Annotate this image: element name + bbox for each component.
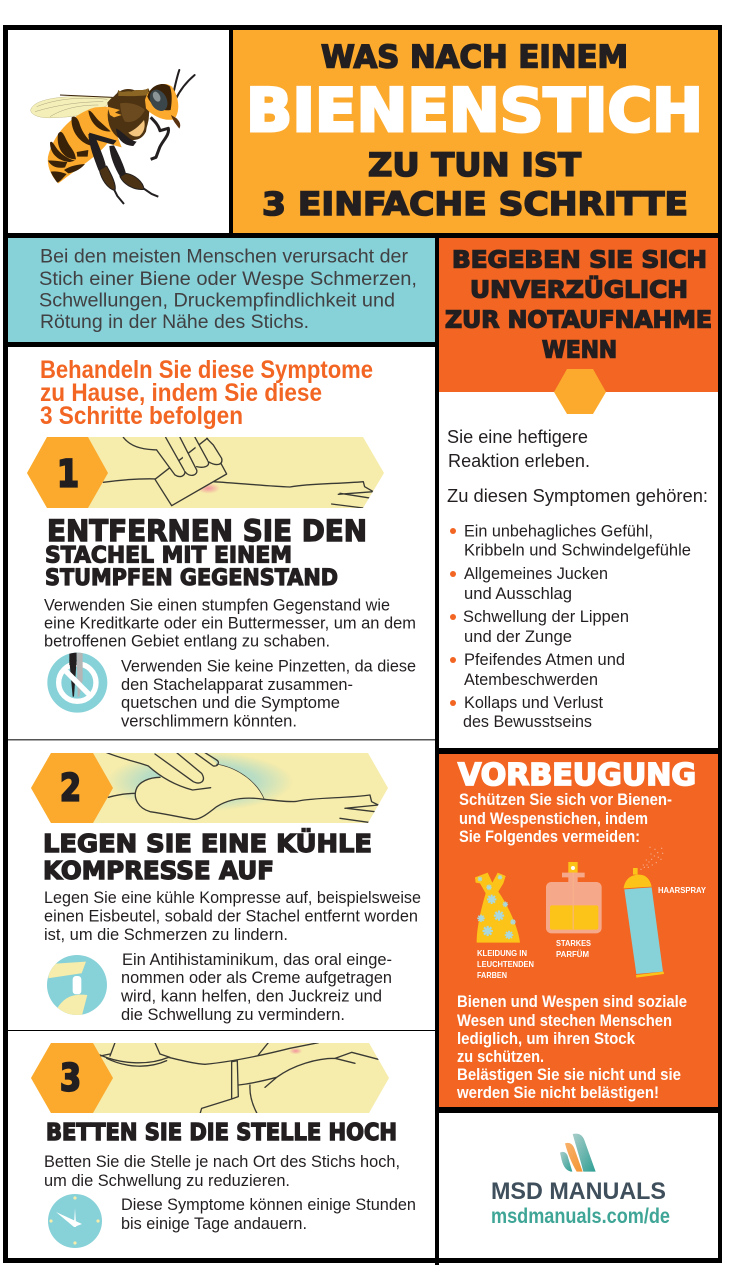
label: strong perfume: STARKES xyxy=(556,938,591,948)
step 1 heading: ENTFERNEN SIE DEN xyxy=(47,514,367,548)
prevention intro: und Wespenstichen, indem xyxy=(459,809,648,828)
symptoms list: und Ausschlag xyxy=(464,584,572,603)
step 1 heading: STACHEL MIT EINEM xyxy=(45,544,292,568)
prevention intro xyxy=(459,790,672,846)
step 2 text: ist, um die Schmerzen zu lindern. xyxy=(44,925,288,944)
icon: antihistamine cream xyxy=(47,955,107,1017)
panel: prevention xyxy=(439,754,718,1107)
prevention message: zu schützen. xyxy=(457,1047,544,1066)
prevention intro: Sie Folgendes vermeiden: xyxy=(459,827,640,846)
title: was nach einem: WAS NACH EINEM xyxy=(321,40,628,76)
title: zu tun ist: ZU TUN IST xyxy=(368,146,581,184)
emergency heading: BEGEBEN SIE SICH xyxy=(452,248,707,274)
prevention intro: Schützen Sie sich vor Bienen- xyxy=(459,790,672,809)
icon: MSD logo mark xyxy=(560,1134,596,1172)
step 3 note xyxy=(121,1195,416,1233)
illustration: elevated arm xyxy=(100,1043,378,1114)
prevention message: werden Sie nicht belästigen! xyxy=(456,1083,659,1102)
symptoms list: Ein unbehagliches Gefühl, xyxy=(464,522,653,540)
heading: treat symptoms at home: Behandeln Sie diese Symptome xyxy=(40,356,373,384)
step number 2: 2 xyxy=(60,766,81,810)
icon: clock xyxy=(48,1194,102,1248)
step 3 text xyxy=(44,1152,400,1190)
icon: hair spray xyxy=(624,847,664,978)
symptoms list xyxy=(450,522,691,731)
illustration: cold compress xyxy=(107,752,378,822)
panel: introduction: Rötung in der Nähe des Stichs. xyxy=(40,311,309,333)
symptoms list: Schwellung der Lippen xyxy=(463,607,629,626)
emergency heading: ZUR NOTAUFNAHME xyxy=(445,308,712,334)
step 1 note: verschlimmern könnten. xyxy=(121,712,297,730)
step 1 text xyxy=(44,596,416,650)
icon: dress xyxy=(475,873,520,943)
logo url: msdmanuals.com/de xyxy=(491,1205,670,1228)
step 3 note: bis einige Tage andauern. xyxy=(121,1214,307,1233)
step 2 note xyxy=(120,950,392,1024)
label: strong perfume xyxy=(556,938,591,959)
step 2 text: Legen Sie eine kühle Kompresse auf, beispielsweise xyxy=(44,888,421,907)
symptoms list: Allgemeines Jucken xyxy=(464,564,608,583)
step number 1: 1 xyxy=(57,452,79,496)
prevention message xyxy=(456,992,687,1102)
symptoms list: Pfeifendes Atmen und xyxy=(464,650,625,669)
step 1 heading xyxy=(45,514,367,591)
logo name: MSD MANUALS xyxy=(491,1178,666,1205)
step 2 note: nommen oder als Creme aufgetragen xyxy=(121,968,392,987)
icon: perfume xyxy=(546,862,602,933)
title: bienenstich: BIENENSTICH xyxy=(246,76,703,146)
symptoms list: und der Zunge xyxy=(464,627,572,646)
symptoms list: Kribbeln und Schwindelgefühle xyxy=(464,540,691,560)
step 2 note: Ein Antihistaminikum, das oral einge- xyxy=(122,950,392,969)
panel: title xyxy=(233,30,718,233)
step 2 banner xyxy=(31,752,388,823)
step 1 banner xyxy=(27,437,384,508)
label: strong perfume: PARFÜM xyxy=(556,949,589,959)
panel: logo xyxy=(439,1113,718,1258)
step 2 text: einen Eisbeutel, sobald der Stachel entfernt worden xyxy=(44,906,418,926)
step 1 text: eine Kreditkarte oder ein Buttermesser, um an dem xyxy=(44,614,416,632)
step 2 note: die Schwellung zu vermindern. xyxy=(121,1005,345,1024)
step 2 heading xyxy=(43,828,372,885)
emergency intro xyxy=(447,427,708,506)
step 2 note: wird, kann helfen, den Juckreiz und xyxy=(120,986,382,1006)
icon: no tweezers xyxy=(47,652,107,713)
step 1 note: Verwenden Sie keine Pinzetten, da diese xyxy=(121,656,416,676)
emergency intro: Zu diesen Symptomen gehören: xyxy=(447,486,708,506)
label: bright clothing: LEUCHTENDEN xyxy=(477,959,534,969)
symptoms list: des Bewusstseins xyxy=(463,712,592,731)
step 3 text: um die Schwellung zu reduzieren. xyxy=(44,1171,290,1190)
prevention message: Bienen und Wespen sind soziale xyxy=(457,992,687,1011)
step 1 heading: STUMPFEN GEGENSTAND xyxy=(45,566,338,591)
step 3 note: Diese Symptome können einige Stunden xyxy=(121,1195,416,1214)
symptoms list: Kollaps und Verlust xyxy=(464,693,603,712)
emergency heading xyxy=(445,248,712,364)
step 1 text: Verwenden Sie einen stumpfen Gegenstand wie xyxy=(44,596,390,614)
step 3 heading: BETTEN SIE DIE STELLE HOCH xyxy=(46,1120,397,1146)
label: hair spray: HAARSPRAY xyxy=(658,885,706,895)
label: bright clothing: KLEIDUNG IN xyxy=(477,948,527,958)
title: 3 einfache schritte: 3 EINFACHE SCHRITTE xyxy=(262,185,688,223)
step 1 note: den Stachelapparat zusammen- xyxy=(121,675,353,694)
panel: introduction xyxy=(8,238,435,342)
heading: treat symptoms at home xyxy=(40,356,373,430)
step 3 banner xyxy=(31,1043,389,1114)
icon: bee xyxy=(31,70,195,204)
panel: introduction: Stich einer Biene oder Wespe Schmerzen, xyxy=(39,268,417,290)
step 2 heading: LEGEN SIE EINE KÜHLE xyxy=(43,828,372,858)
prevention message: Wesen und stechen Menschen xyxy=(457,1011,672,1030)
emergency heading: UNVERZÜGLICH xyxy=(470,276,688,304)
step 2 text xyxy=(44,888,421,944)
emergency intro: Reaktion erleben. xyxy=(448,451,590,471)
step 1 note: quetschen und die Symptome xyxy=(121,693,340,712)
emergency heading: WENN xyxy=(542,338,617,364)
label: bright clothing xyxy=(477,948,534,980)
panel: emergency xyxy=(439,238,718,748)
step 1 note xyxy=(121,656,416,730)
prevention message: Belästigen Sie sie nicht und sie xyxy=(457,1065,681,1084)
heading: treat symptoms at home: 3 Schritte befolgen xyxy=(40,402,243,430)
label: bright clothing: FARBEN xyxy=(477,970,507,980)
panel: introduction: Bei den meisten Menschen verursacht der xyxy=(40,246,409,268)
prevention heading: VORBEUGUNG xyxy=(458,758,696,793)
heading: treat symptoms at home: zu Hause, indem Sie diese xyxy=(40,379,322,407)
hexagon xyxy=(554,369,606,414)
panel: bee image xyxy=(8,30,229,233)
symptoms list: Atembeschwerden xyxy=(464,670,598,689)
step 2 heading: KOMPRESSE AUF xyxy=(43,856,274,885)
step number 3: 3 xyxy=(60,1056,81,1100)
illustration: scraping with a card xyxy=(103,437,373,508)
step 3 text: Betten Sie die Stelle je nach Ort des Stichs hoch, xyxy=(44,1152,400,1171)
panel: introduction: Schwellungen, Druckempfindlichkeit und xyxy=(39,290,395,312)
emergency intro: Sie eine heftigere xyxy=(447,427,588,447)
prevention message: lediglich, um ihren Stock xyxy=(457,1029,635,1048)
step 1 text: betroffenen Gebiet entlang zu schaben. xyxy=(44,632,330,650)
panel: home treatment steps xyxy=(8,347,435,1258)
